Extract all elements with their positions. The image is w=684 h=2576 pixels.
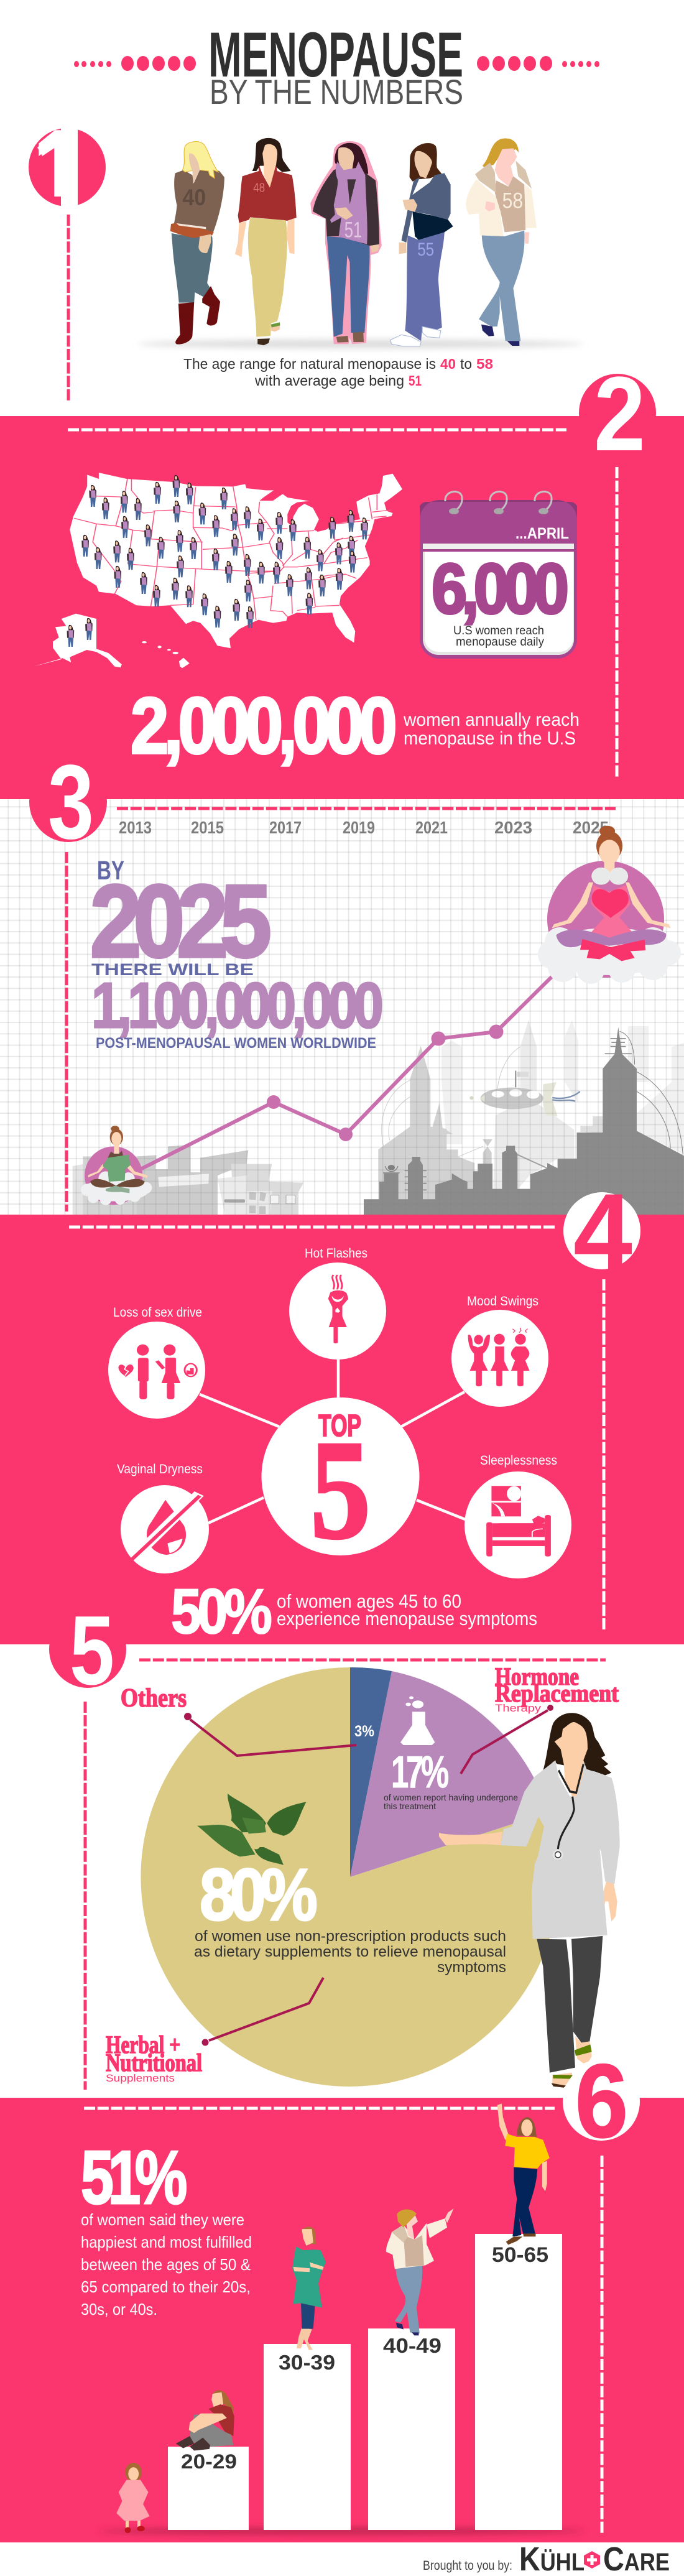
figures on bars: [116, 2103, 550, 2533]
symptom: mood swings: Mood Swings: [467, 1294, 538, 1309]
icon: leaves: [197, 1794, 306, 1865]
label: others: [121, 1684, 356, 1756]
year axis: 2013: [119, 818, 152, 837]
large meditating woman: [538, 826, 681, 984]
illustration: five women: [170, 138, 537, 346]
cityscape right: [364, 1020, 684, 1215]
icon: crossed drop: [131, 1494, 200, 1560]
woman aged 58: [466, 139, 537, 346]
dashed divider: [67, 215, 70, 402]
calendar caption: U.S women reach: [453, 624, 544, 637]
dashed divider horizontal: [68, 428, 566, 432]
80 percent caption: as dietary supplements to relieve menopausal: [194, 1944, 506, 1960]
number badge 5: 5: [70, 1596, 114, 1705]
number badge 6: 6: [575, 2042, 628, 2159]
3 percent label: 3%: [354, 1723, 374, 1740]
connector lines: [200, 1359, 465, 1523]
sponsor logo: [519, 2541, 670, 2576]
statistic description: 65 compared to their 20s,: [81, 2277, 251, 2296]
year axis: 2019: [343, 818, 375, 837]
symptom: loss of sex drive: Loss of sex drive: [113, 1305, 202, 1320]
statistic description: happiest and most fulfilled: [81, 2233, 252, 2251]
calendar rings: [445, 491, 552, 511]
by: BY: [97, 856, 124, 886]
number badge 1: [29, 128, 106, 206]
title block: [74, 19, 599, 111]
center circle: TOP: [318, 1409, 361, 1443]
subheading: BY THE NUMBERS: [210, 72, 463, 111]
map Alaska: [34, 614, 122, 667]
line chart: [139, 970, 558, 1170]
statistic caption: of women ages 45 to 60: [277, 1590, 461, 1612]
dashed divider horizontal: [84, 2107, 555, 2110]
symptom: hot flashes: [289, 1246, 386, 1360]
dashed divider horizontal: [139, 1658, 606, 1662]
woman in green dress: [292, 2226, 326, 2350]
caption line 2: with average age being: [254, 373, 404, 389]
big number: 2,000,000: [131, 682, 394, 771]
pink band: [0, 1215, 684, 1644]
panel: section 6 happiness by age: [0, 2042, 684, 2542]
slice: 17 percent hormone: [350, 1671, 548, 1877]
dashed divider vertical: [65, 852, 68, 1212]
symptom: sleeplessness: Sleeplessness: [480, 1453, 557, 1468]
year axis: [119, 818, 609, 837]
cityscape left: [73, 1145, 303, 1215]
center circle: 5: [310, 1412, 371, 1568]
statistic caption: women annually reach: [403, 710, 580, 730]
calendar: [420, 491, 577, 659]
year axis: 2025: [573, 818, 609, 837]
sponsor caption: Brought to you by:: [423, 2559, 512, 2573]
child figure: [116, 2463, 150, 2533]
80 percent value: 80%: [200, 1854, 316, 1936]
panel: section 2 US statistics: [0, 355, 684, 799]
dashed divider vertical: [601, 2156, 603, 2534]
map Hawaii: [142, 641, 190, 668]
bar 30-39: [264, 2344, 351, 2530]
label: others: Others: [121, 1684, 187, 1713]
17 percent caption line 2: this treatment: [384, 1801, 436, 1811]
statistic caption line 2: experience menopause symptoms: [277, 1608, 537, 1629]
dashed divider horizontal: [117, 807, 616, 810]
statistic description: between the ages of 50 &: [81, 2255, 251, 2274]
80 percent caption: symptoms: [437, 1959, 506, 1976]
year axis: 2023: [494, 818, 532, 837]
caption: 58: [476, 356, 493, 372]
symptom: loss of sex drive: [108, 1305, 205, 1419]
label: hormone replacement therapy: Replacement: [495, 1679, 619, 1707]
number badge 3: 3: [48, 743, 94, 861]
label: herbal and nutritional supplements: [106, 1978, 323, 2084]
map land: [70, 473, 402, 648]
woman aged 55: [391, 143, 453, 346]
grid overlay: [0, 799, 684, 1215]
label: hormone replacement therapy: Therapy: [495, 1702, 542, 1714]
woman aged 51, highlighted: [310, 141, 382, 344]
caption: The age range for natural menopause is: [183, 356, 436, 372]
year axis: 2015: [191, 818, 224, 837]
number badge 4: 4: [573, 1172, 632, 1293]
dashed divider vertical: [616, 467, 618, 777]
label: herbal and nutritional supplements: Nutritional: [106, 2049, 202, 2077]
statistic description: 30s, or 40s.: [81, 2300, 157, 2319]
statistic caption line 2: menopause in the U.S: [404, 728, 576, 749]
statistic 50 percent: 50%: [171, 1576, 271, 1647]
footer: sponsor: [423, 2541, 670, 2576]
map figures: [67, 475, 368, 647]
center circle: [261, 1397, 419, 1568]
sitting young woman: [176, 2390, 234, 2450]
caption line 2: 51: [409, 373, 422, 389]
big number: 1,100,000,000: [91, 970, 382, 1041]
description: POST-MENOPAUSAL WOMEN WORLDWIDE: [96, 1035, 376, 1052]
80 percent caption: of women use non-prescription products such: [195, 1928, 506, 1945]
label: hormone replacement therapy: Hormone: [495, 1662, 579, 1690]
icon: flask: [400, 1697, 435, 1745]
calendar caption line 2: menopause daily: [456, 636, 544, 649]
icon: hot flash figure: [328, 1275, 348, 1343]
headline block: [90, 856, 382, 1052]
doctor illustration: [439, 1713, 620, 2088]
label: herbal and nutritional supplements: Herbal +: [106, 2031, 180, 2059]
woman aged 48: 48: [253, 180, 265, 195]
statistic description: of women said they were: [81, 2210, 244, 2229]
title decoration: right dots: [477, 56, 599, 71]
small meditating woman: [81, 1126, 152, 1205]
slice: 80 percent herbal: [141, 1667, 558, 2087]
icon: three women: [468, 1328, 529, 1386]
dashed divider horizontal: [69, 1225, 555, 1229]
symptom: mood swings: [451, 1294, 548, 1407]
bar 40-49: [368, 2328, 455, 2530]
symptom: sleeplessness: [464, 1453, 571, 1578]
statistic description: [81, 2210, 252, 2319]
17 percent caption: of women report having undergone: [384, 1792, 518, 1802]
number badge 1: 1: [32, 105, 85, 237]
bar 30-39: 30-39: [279, 2351, 335, 2374]
icon: couple: [118, 1345, 196, 1399]
woman aged 40: [170, 142, 224, 345]
symptom: hot flashes: Hot Flashes: [305, 1246, 367, 1261]
bar 50-65: [475, 2234, 562, 2530]
number badge 2: 2: [594, 355, 645, 473]
grid background: [0, 799, 684, 1215]
icon: bed and window: [486, 1486, 551, 1557]
ground shadow: [138, 340, 583, 348]
year axis: 2017: [269, 818, 302, 837]
year axis: 2021: [415, 818, 448, 837]
calendar month: ...APRIL: [515, 525, 569, 542]
there will be: THERE WILL BE: [91, 960, 254, 979]
label: hormone replacement therapy: [461, 1662, 619, 1774]
woman pointing up: [386, 2208, 454, 2335]
calendar number: 6,000: [432, 550, 566, 629]
caption: 40: [440, 356, 456, 372]
bar 20-29: 20-29: [181, 2450, 237, 2473]
year 2025: 2025: [90, 864, 269, 978]
bar 40-49: 40-49: [383, 2334, 441, 2357]
woman aged 40: 40: [183, 184, 206, 210]
statistic 51 percent: 51%: [81, 2135, 186, 2220]
woman aged 58: 58: [502, 188, 523, 213]
symptom: vaginal dryness: Vaginal Dryness: [117, 1462, 203, 1476]
panel: section 1 age range: [29, 105, 583, 402]
bar shadow: [99, 2527, 584, 2535]
dashed divider vertical: [83, 1702, 87, 2090]
dashed divider vertical: [602, 1279, 606, 1629]
woman aged 48: [235, 138, 297, 345]
panel: section 3 growth chart: [0, 743, 684, 1215]
pink band: [0, 2098, 684, 2542]
panel: section 4 top five symptoms: [0, 1172, 684, 1647]
17 percent value: 17%: [391, 1748, 449, 1797]
title decoration: left dots: [74, 56, 196, 71]
woman aged 51, highlighted: 51: [344, 218, 362, 243]
calendar ring clasps: [449, 508, 548, 514]
bar 50-65: 50-65: [492, 2243, 548, 2267]
pink band: [0, 416, 684, 799]
bar 20-29: [168, 2447, 249, 2530]
label: herbal and nutritional supplements: Supplements: [106, 2072, 175, 2084]
woman in yellow waving: [497, 2103, 550, 2245]
state borders: [74, 479, 392, 620]
80 percent caption: [194, 1928, 506, 1976]
symptom: vaginal dryness: [117, 1462, 209, 1573]
US map with women figures: [34, 473, 402, 668]
heading: MENOPAUSE: [208, 19, 463, 90]
caption: to: [460, 356, 472, 372]
pie chart: [141, 1667, 558, 2087]
slice: 3 percent others: [350, 1667, 392, 1877]
panel: section 5 treatments pie chart: [49, 1596, 620, 2090]
woman aged 55: 55: [417, 239, 434, 259]
